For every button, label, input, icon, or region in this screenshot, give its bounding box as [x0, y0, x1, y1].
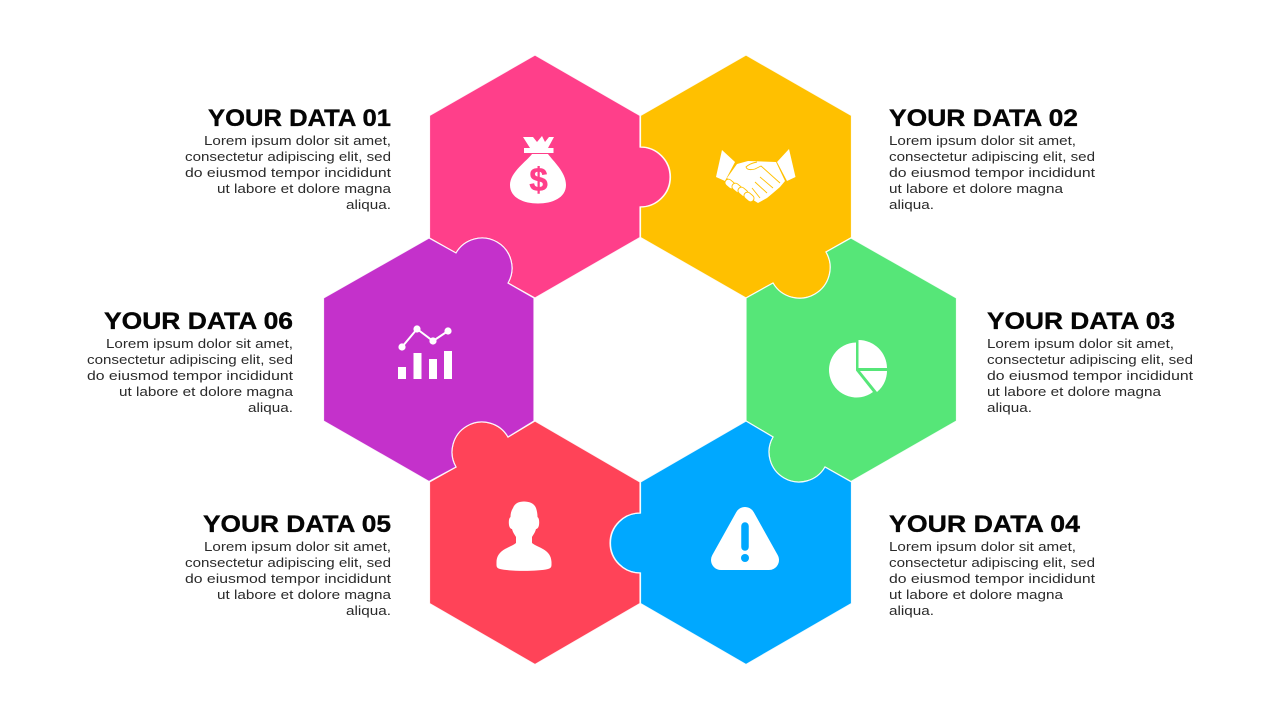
pink hexagon puzzle piece [430, 55, 670, 298]
body text [889, 133, 1095, 212]
heading: YOUR DATA 02 [889, 105, 1078, 132]
green hexagon puzzle piece [746, 238, 956, 482]
body text: consectetur adipiscing elit, sed [185, 555, 391, 570]
icon: money bag [510, 136, 566, 204]
body text: aliqua. [889, 197, 934, 212]
body text: Lorem ipsum dolor sit amet, [204, 133, 391, 148]
icon: line and bar chart [398, 325, 452, 379]
body text: Lorem ipsum dolor sit amet, [987, 336, 1174, 351]
body text: Lorem ipsum dolor sit amet, [889, 133, 1076, 148]
body text: ut labore et dolore magna [119, 384, 294, 399]
body text: consectetur adipiscing elit, sed [889, 555, 1095, 570]
body text: do eiusmod tempor incididunt [87, 368, 293, 383]
icon: money bag: $ [529, 161, 548, 198]
panel: your data 03 [746, 238, 1193, 482]
body text: consectetur adipiscing elit, sed [87, 352, 293, 367]
body text [87, 336, 294, 415]
icon: pie chart [829, 340, 887, 397]
panel: your data 02 [640, 55, 1095, 298]
body text: ut labore et dolore magna [987, 384, 1162, 399]
heading: YOUR DATA 06 [104, 308, 293, 335]
body text: aliqua. [889, 603, 934, 618]
body text: do eiusmod tempor incididunt [889, 165, 1095, 180]
heading: YOUR DATA 01 [208, 105, 391, 132]
panel: your data 01 [185, 55, 670, 298]
body text [987, 336, 1193, 415]
panel: your data 06 [87, 238, 534, 482]
heading: YOUR DATA 04 [889, 511, 1081, 538]
panel: your data 05 [185, 421, 640, 664]
icon: person silhouette [496, 502, 552, 571]
body text: do eiusmod tempor incididunt [185, 165, 391, 180]
heading: YOUR DATA 03 [987, 308, 1175, 335]
body text: do eiusmod tempor incididunt [889, 571, 1095, 586]
body text: Lorem ipsum dolor sit amet, [204, 539, 391, 554]
red hexagon puzzle piece [430, 421, 640, 664]
body text: do eiusmod tempor incididunt [185, 571, 391, 586]
body text: consectetur adipiscing elit, sed [889, 149, 1095, 164]
body text: ut labore et dolore magna [217, 587, 392, 602]
body text: ut labore et dolore magna [889, 181, 1064, 196]
body text: aliqua. [987, 400, 1032, 415]
heading: YOUR DATA 05 [203, 511, 391, 538]
body text: ut labore et dolore magna [217, 181, 392, 196]
yellow hexagon puzzle piece [640, 55, 852, 298]
body text: Lorem ipsum dolor sit amet, [106, 336, 293, 351]
body text: consectetur adipiscing elit, sed [987, 352, 1193, 367]
purple hexagon puzzle piece [324, 238, 534, 482]
panel: your data 04 [610, 421, 1095, 664]
blue hexagon puzzle piece [610, 421, 852, 664]
body text: ut labore et dolore magna [889, 587, 1064, 602]
body text [185, 133, 392, 212]
body text: aliqua. [346, 197, 391, 212]
body text: consectetur adipiscing elit, sed [185, 149, 391, 164]
icon: handshake [716, 149, 796, 203]
body text [185, 539, 392, 618]
body text: aliqua. [248, 400, 293, 415]
body text: do eiusmod tempor incididunt [987, 368, 1193, 383]
body text: aliqua. [346, 603, 391, 618]
body text [889, 539, 1095, 618]
body text: Lorem ipsum dolor sit amet, [889, 539, 1076, 554]
icon: warning triangle [721, 517, 769, 562]
